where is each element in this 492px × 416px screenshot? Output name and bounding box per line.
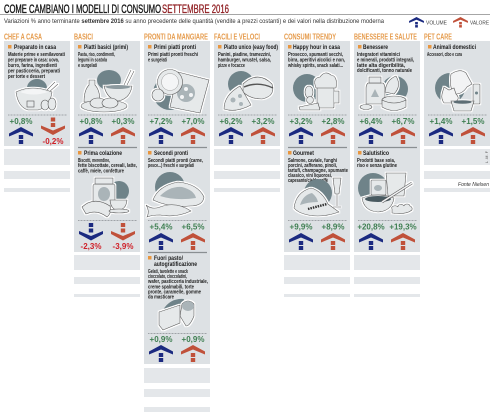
volume value: +3,2% (290, 117, 312, 126)
volume arrow up (149, 233, 173, 250)
value value: +2,8% (322, 117, 344, 126)
panel title: Gourmet (293, 151, 314, 157)
bullet (78, 151, 82, 154)
source note: Fonte Nielsen (458, 182, 489, 188)
value arrow up (461, 127, 485, 144)
blank blocks (284, 255, 350, 297)
value value: +7,0% (182, 117, 204, 126)
description: Pasta, riso, condimenti, (78, 52, 115, 58)
volume arrow down (79, 223, 103, 240)
title: COME CAMBIANO I MODELLI DI CONSUMO (4, 2, 161, 16)
description: per torte e dessert (8, 74, 45, 80)
description (218, 52, 271, 69)
description: per pasticceria, preparati (8, 68, 60, 74)
panel: consumi trendy (284, 41, 350, 252)
value arrow up (321, 127, 345, 144)
description: creme spalmabili, torte (148, 284, 194, 290)
column: pronti da mangiare (144, 32, 210, 412)
value arrow up (181, 345, 205, 362)
column: facili e veloci (214, 32, 280, 192)
description: pesce...) freschi e surgelati (148, 163, 194, 169)
description (148, 52, 198, 64)
description: Integratori vitaminici (357, 52, 400, 58)
description: Salmone, caviale, funghi (288, 158, 337, 164)
value value: +6,5% (182, 222, 204, 232)
volume value: +0,8% (10, 117, 32, 126)
volume arrow up (359, 233, 383, 250)
legend value label: VALORE (470, 20, 489, 26)
panel: basici (74, 41, 140, 252)
value arrow up (111, 127, 135, 144)
description: hamburger, wrustel, salsa, (218, 58, 271, 64)
blank blocks (144, 368, 210, 412)
value arrow up (391, 233, 415, 250)
description: capesante/cialde caffè (288, 178, 328, 184)
description: porcini, zafferano, pinoli, (288, 163, 337, 169)
column: basici (74, 32, 140, 297)
description (357, 158, 397, 169)
panel title: Salutistico (363, 151, 389, 157)
panel title: Piatto unico (easy food) (224, 45, 278, 51)
volume value: +0,9% (150, 335, 172, 344)
panel: pronti (144, 41, 210, 364)
bullet (288, 151, 292, 154)
legend value arrow (453, 17, 468, 28)
column: chef a casa (4, 32, 70, 192)
bullet (8, 45, 12, 48)
icon: pets (435, 71, 480, 111)
panel title: Secondi pronti (154, 151, 188, 157)
bullet (288, 45, 292, 48)
description (287, 52, 345, 69)
bullet (358, 45, 362, 48)
legend volume label: VOLUME (426, 20, 447, 26)
volume value: +6,2% (220, 117, 242, 126)
icon: bowl with whisk (16, 79, 58, 110)
description: Secondi piatti pronti (carne, (148, 158, 203, 164)
panel title (154, 256, 198, 268)
description: Accessori, cibo e cura (427, 52, 462, 58)
value value: +0,9% (182, 335, 204, 344)
bullet (148, 256, 152, 260)
description: whisky spirits, snack salati... (287, 63, 343, 69)
title date: SETTEMBRE 2016 (162, 2, 229, 16)
panel: benessere (354, 41, 420, 252)
panel title: Primi piatti pronti (154, 45, 196, 51)
description: Prosecco, spumanti secchi, (288, 52, 343, 58)
value arrow up (251, 127, 275, 144)
blank blocks (4, 149, 70, 192)
value arrow up (181, 233, 205, 250)
panel title: Fuori pasto/ (154, 256, 183, 262)
panel title: Piatti basici (primi) (84, 45, 128, 51)
blank blocks (214, 149, 280, 192)
description: classico, vini liquorosi, (288, 173, 332, 179)
icon: supplements jar (360, 76, 408, 110)
icon: steak and fish (146, 172, 204, 217)
description: pizze e focacce (218, 63, 245, 69)
value figure: -0,2% (43, 137, 63, 146)
panel title: Happy hour in casa (293, 45, 341, 51)
description: Biscotti, merendine, (78, 158, 110, 164)
description (78, 158, 137, 174)
volume value: +20,8% (357, 222, 385, 232)
heading: CONSUMI TRENDY (284, 32, 336, 42)
blank blocks (354, 255, 420, 297)
panel title: Preparato in casa (14, 45, 57, 51)
value arrow up (181, 127, 205, 144)
description (147, 269, 208, 300)
bullet (358, 151, 362, 154)
icon: pizza and burger (224, 71, 273, 110)
description: burro, farina, ingredienti (8, 63, 57, 69)
description (78, 52, 115, 69)
volume arrow up (9, 127, 33, 144)
value value: +6,7% (392, 117, 414, 126)
description: riso e senza glutine (357, 163, 397, 169)
column: consumi trendy (284, 32, 350, 297)
volume value: +5,4% (150, 222, 172, 232)
volume figure: -2,3% (81, 242, 101, 251)
description (357, 52, 414, 74)
value arrow up (391, 127, 415, 144)
description (148, 158, 203, 169)
volume value: +7,2% (150, 117, 172, 126)
volume arrow up (289, 127, 313, 144)
description: Panini, piadine, tramezzini, (218, 52, 271, 58)
volume value: +6,4% (360, 117, 382, 126)
icon: soy bowl and glass (358, 173, 412, 214)
heading: CHEF A CASA (4, 32, 42, 42)
value arrow up (321, 233, 345, 250)
value value: +19,3% (389, 222, 417, 232)
description: per preparare in casa: uova, (8, 58, 59, 64)
volume arrow up (79, 127, 103, 144)
description: fette biscottate, cereali, latte, (78, 163, 137, 169)
description: pronte, caramelle, gomme (148, 290, 201, 296)
panel title: Benessere (363, 45, 389, 51)
icon: beer mug (293, 73, 339, 110)
icon: salmon and champagne (294, 178, 341, 216)
description: caffè, miele, confetture (78, 168, 124, 174)
volume value: +9,9% (290, 222, 312, 232)
panel: animali domestici (424, 41, 490, 146)
value value: +8,9% (322, 222, 344, 232)
panel title: Prima colazione (84, 151, 123, 157)
value arrow down (41, 118, 65, 135)
description: cioccolato, cioccolatini, (148, 274, 187, 280)
description: wafer, pasticceria industriale, (147, 279, 208, 285)
bullet (78, 45, 82, 48)
volume value: +0,8% (80, 117, 102, 126)
bullet (148, 45, 152, 48)
legend volume arrow (409, 17, 424, 28)
volume arrow up (429, 127, 453, 144)
value value: +1,5% (462, 117, 484, 126)
subtitle: Variazioni % anno terminante settembre 2016 su anno precedente delle quantità (vendite a prezzi costanti) e dei valori nella distribuzione moderna (4, 18, 384, 25)
icon: breakfast (82, 178, 129, 217)
column: pet care (424, 32, 490, 192)
heading: BASICI (74, 32, 93, 42)
value value: +3,2% (252, 117, 274, 126)
volume value: +1,4% (430, 117, 452, 126)
volume arrow up (289, 233, 313, 250)
description: Prodotti base soia, (357, 158, 395, 164)
panel: piatto unico (214, 41, 280, 146)
bullet (428, 45, 432, 48)
description: e minerali, prodotti integrali, (357, 58, 414, 64)
volume arrow up (359, 127, 383, 144)
description: e surgelati (78, 63, 97, 69)
description: e surgelati (148, 58, 167, 64)
icon: cake and ice cream (159, 299, 194, 330)
volume arrow up (149, 127, 173, 144)
description: dolcificanti, tonno naturale (357, 68, 412, 74)
volume arrow up (149, 345, 173, 362)
credit initials: L.M.F (485, 150, 489, 163)
icon: pasta dish, oil jug (81, 70, 134, 112)
description (8, 52, 65, 80)
bullet (218, 45, 222, 48)
description: da masticare (148, 294, 174, 300)
heading: BENESSERE E SALUTE (354, 32, 417, 42)
volume arrow up (219, 127, 243, 144)
blank blocks (74, 255, 140, 297)
description: tartufi, champagne, spumante (288, 168, 348, 174)
heading: PRONTI DA MANGIARE (144, 32, 208, 42)
description: Gelati, tavolette e snack (148, 269, 188, 275)
value arrow down (111, 223, 135, 240)
description (288, 158, 348, 184)
heading: PET CARE (424, 32, 452, 42)
description: legumi in scatola (78, 58, 107, 64)
bullet (148, 151, 152, 154)
description: Materie prime e semilavorati (8, 52, 65, 58)
heading: FACILI E VELOCI (214, 32, 260, 42)
legend (409, 17, 489, 28)
icon: lemon and pack (152, 70, 209, 113)
column: benessere e salute (354, 32, 420, 297)
panel title: autogratificazione (154, 262, 198, 268)
blank blocks (424, 149, 490, 192)
description: latte alta digeribilità, (357, 63, 406, 69)
panel title: Animali domestici (433, 45, 476, 51)
value figure: -3,9% (113, 242, 133, 251)
value value: +0,3% (112, 117, 134, 126)
description: birra, aperitivi alcolici e non, (288, 58, 345, 64)
panel: preparato in casa (4, 41, 70, 146)
description: Primi piatti pronti freschi (148, 52, 198, 58)
